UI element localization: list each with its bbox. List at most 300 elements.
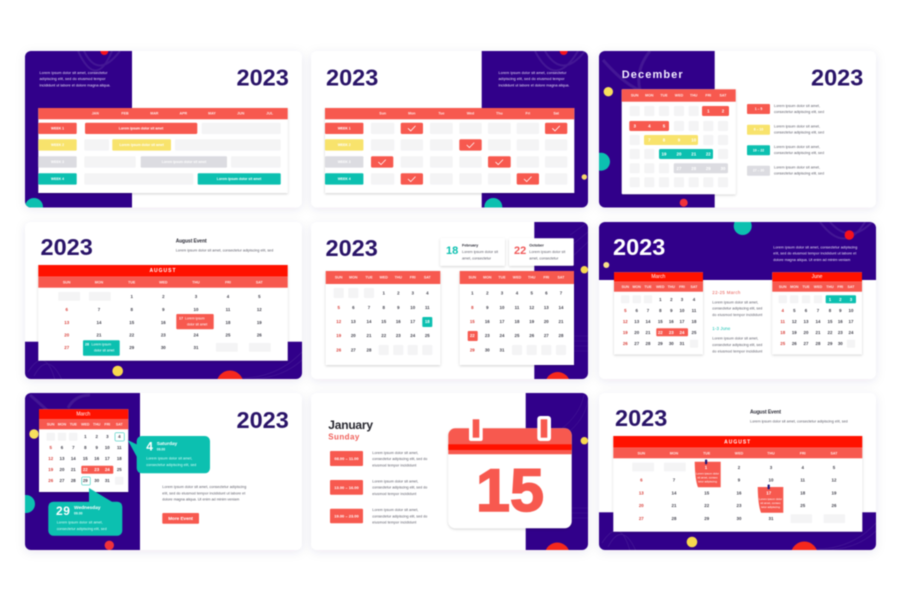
June calendar: 11 <box>780 319 786 324</box>
right month calendar: 15 <box>470 319 475 324</box>
March calendar: March <box>76 411 90 417</box>
March calendar: 23 <box>94 467 100 472</box>
event notes <box>712 290 762 353</box>
date card: February 18: 18 <box>446 245 458 257</box>
March calendar: 27 <box>60 478 65 483</box>
December calendar: MON <box>645 94 654 98</box>
March calendar: 9 <box>670 308 673 313</box>
intro text: dolore magna aliqua. Ut enim ad minim veniam <box>773 258 850 262</box>
August calendar: 5 <box>833 465 836 470</box>
August calendar: MON <box>95 280 104 284</box>
August calendar: 10 <box>194 307 199 312</box>
legend: consectetur adipiscing elit, sed <box>774 110 824 114</box>
right month calendar: 12 <box>529 305 535 310</box>
check table: WEEK 3 <box>338 160 351 164</box>
August calendar: AUGUST <box>724 439 751 445</box>
event notes: consectetur adipiscing elit, sed <box>712 307 762 311</box>
March calendar: THU <box>668 285 675 289</box>
December calendar: 1 <box>707 108 710 114</box>
check table: WEEK 2 <box>338 143 351 147</box>
December calendar: 21 <box>691 152 697 156</box>
August calendar: 14 <box>672 490 677 496</box>
August calendar: 30 <box>161 345 166 350</box>
June calendar: TUE <box>802 285 810 289</box>
March calendar: 31 <box>680 341 685 346</box>
left month calendar <box>326 271 440 365</box>
event marker: 17 <box>176 314 214 329</box>
body text: elit, sed do eiusmod tempor incididunt ut labore et <box>162 491 245 495</box>
August calendar: THU <box>192 280 200 284</box>
August calendar: 20 <box>639 503 644 508</box>
August calendar: THU <box>767 451 775 455</box>
August calendar: 18 <box>226 320 231 325</box>
intro text: incididunt ut labore et dolore magna aliqua. <box>498 84 570 88</box>
December calendar: FRI <box>705 94 711 98</box>
year heading: 2023 <box>236 64 289 90</box>
left month calendar: 11 <box>425 305 430 310</box>
August calendar: 15 <box>129 320 135 325</box>
June calendar: SAT <box>848 285 855 289</box>
callout: Wednesday 29: Lorem ipsum dolor sit amet, <box>57 521 103 525</box>
March calendar: 22 <box>658 330 663 335</box>
left month calendar: 26 <box>336 348 342 352</box>
December calendar: 27 <box>677 166 682 171</box>
August calendar: 12 <box>257 307 262 312</box>
legend: consectetur adipiscing elit, sed <box>774 172 824 176</box>
August calendar: 27 <box>639 516 644 521</box>
December calendar: 28 <box>691 166 697 171</box>
purple sidebar with dots <box>592 51 715 208</box>
event description: August Event <box>176 239 207 245</box>
August calendar: 2 <box>738 465 741 470</box>
March calendar: 18 <box>117 456 122 461</box>
legend: Lorem ipsum dolor sit amet, <box>774 104 820 108</box>
June calendar: 28 <box>816 341 821 346</box>
yellow dot <box>603 262 609 268</box>
sticky note: 17: Lorem ipsum dolor <box>759 497 782 501</box>
date card: February 18: amet, consectetur <box>462 256 492 260</box>
right month calendar: 9 <box>486 305 489 310</box>
December calendar: 19 <box>662 152 667 156</box>
left month calendar: 18 <box>425 319 430 324</box>
August calendar: 21 <box>672 503 677 508</box>
August calendar: SAT <box>831 451 838 455</box>
gantt table: JAN <box>92 112 99 116</box>
August calendar: 6 <box>640 478 643 482</box>
sticky note: 1: Lorem ipsum dolor <box>696 472 719 476</box>
legend: 6 – 10 <box>754 128 763 132</box>
year heading: 2023 <box>40 234 93 260</box>
left month calendar: 20 <box>351 333 356 338</box>
left month calendar: 13 <box>351 319 356 324</box>
date card: October 22 <box>509 238 574 266</box>
year heading: 2023 <box>326 64 378 90</box>
event marker: 17: Lorem ipsum <box>185 316 205 320</box>
August calendar: 5 <box>258 294 261 299</box>
gantt table: MAY <box>208 112 216 116</box>
yellow dot <box>581 437 588 444</box>
March calendar <box>39 409 128 492</box>
August calendar: MON <box>670 451 679 455</box>
right month calendar: 11 <box>515 305 520 310</box>
right month calendar: MON <box>483 275 492 279</box>
March calendar: 20 <box>60 467 65 472</box>
callout: Saturday 4: Saturday <box>157 441 178 447</box>
June calendar: 14 <box>816 319 821 324</box>
legend: 27 – 30 <box>753 169 764 173</box>
March calendar: 16 <box>669 319 674 324</box>
right month calendar: 28 <box>559 333 564 338</box>
time slots: consectetur adipiscing elit, sed do <box>372 486 427 490</box>
left month calendar: 12 <box>336 319 342 324</box>
June calendar: 4 <box>781 308 784 313</box>
gantt table: MAR <box>150 112 159 116</box>
August calendar: 23 <box>161 332 166 338</box>
March calendar: THU <box>93 422 101 426</box>
March calendar: 17 <box>105 456 110 461</box>
sticky note: 17: sit amet, consec <box>760 501 781 505</box>
March calendar: TUE <box>644 285 652 289</box>
March calendar: 19 <box>623 330 628 335</box>
December calendar: 10 <box>691 138 697 142</box>
legend: consectetur adipiscing elit, sed <box>774 130 824 134</box>
sticky note: 17: tetur adipiscing <box>761 505 780 509</box>
June calendar: 16 <box>838 319 843 324</box>
right month calendar: 16 <box>485 319 490 324</box>
March calendar: 12 <box>48 456 54 461</box>
legend: Lorem ipsum dolor sit amet, <box>774 145 820 149</box>
gantt table: JUL <box>266 112 274 116</box>
left month calendar: 3 <box>411 290 414 296</box>
August calendar: 4 <box>227 294 230 299</box>
right month calendar: 24 <box>500 333 505 338</box>
legend: 1 – 5 <box>755 107 762 111</box>
date card: February 18: February <box>462 243 479 247</box>
left month calendar: 23 <box>396 333 401 338</box>
right month calendar: WED <box>513 275 522 279</box>
August calendar: 24 <box>194 332 199 338</box>
June calendar: 7 <box>817 308 820 313</box>
time slots: Lorem ipsum dolor sit amet, <box>372 508 418 512</box>
March calendar: WED <box>81 422 90 426</box>
August calendar: 12 <box>832 478 837 482</box>
August calendar: 11 <box>226 307 231 312</box>
event marker: 28: dolor sit amet <box>94 348 114 352</box>
March calendar: 29 <box>658 341 663 346</box>
March calendar: 24 <box>680 330 685 335</box>
August calendar: WED <box>735 451 744 455</box>
right month calendar: 22 <box>470 333 475 338</box>
left month calendar: 9 <box>397 305 400 310</box>
callout: Wednesday 29: 09.00 <box>74 512 83 516</box>
December calendar: TUE <box>660 94 668 98</box>
left month calendar: 4 <box>426 290 429 296</box>
time slots: Lorem ipsum dolor sit amet, <box>372 451 418 455</box>
callout: Wednesday 29: Wednesday <box>74 505 101 511</box>
March calendar: 12 <box>623 319 628 324</box>
time slots: consectetur adipiscing elit, sed do <box>372 457 427 461</box>
right month calendar: 7 <box>560 290 563 296</box>
check table <box>325 108 574 193</box>
August calendar: 7 <box>98 307 101 312</box>
sticky note: 1: sit amet, consec <box>697 476 718 480</box>
left month calendar: 24 <box>410 333 416 338</box>
December calendar: 29 <box>706 166 711 171</box>
August calendar: 31 <box>194 345 199 350</box>
time slots: 08.00 – 11.00 <box>334 456 359 461</box>
intro text: incididunt ut labore et dolore magna aliqua. <box>40 84 110 88</box>
right month calendar: 19 <box>529 319 535 324</box>
left month calendar: 6 <box>352 305 355 310</box>
purple sidebar with dots <box>534 222 588 397</box>
March calendar: 20 <box>634 330 640 335</box>
purple footer band with dots <box>24 340 303 380</box>
time slots: eiusmod tempor incididunt <box>372 520 416 524</box>
March calendar: 4 <box>693 297 696 302</box>
legend <box>747 104 824 176</box>
August calendar: FRI <box>800 451 806 455</box>
year heading: 2023 <box>326 235 378 261</box>
event notes: 1-3 June <box>712 326 731 331</box>
event marker: 28: 28 <box>85 342 89 346</box>
callout: Saturday 4: consectetur adipiscing elit, sed <box>146 463 196 467</box>
right month calendar: 4 <box>516 290 519 296</box>
June calendar: 3 <box>850 297 853 302</box>
June calendar: June <box>812 274 823 280</box>
March calendar: 5 <box>49 445 52 450</box>
right month calendar: 25 <box>515 333 520 338</box>
left month calendar: 16 <box>396 319 401 324</box>
callout: Saturday 4 <box>128 436 210 473</box>
right month calendar: 6 <box>545 290 548 296</box>
panel: two month calendars <box>311 222 588 397</box>
intro text: adipiscing elit, sed do eiusmod tempor <box>498 77 565 81</box>
event marker: 17: 17 <box>179 316 183 320</box>
August calendar: FRI <box>225 280 231 284</box>
callout: Saturday 4: Lorem ipsum dolor sit amet, <box>146 457 192 461</box>
date card: October 22: 22 <box>514 245 526 257</box>
August calendar: 23 <box>737 503 742 508</box>
March calendar: 7 <box>72 445 75 450</box>
right month calendar: SAT <box>558 275 565 279</box>
gantt table: FEB <box>121 112 129 116</box>
August calendar: 19 <box>257 320 262 325</box>
yellow dot <box>581 266 588 273</box>
panel: weekly gantt schedule <box>25 47 302 216</box>
March calendar: 4 <box>118 434 121 439</box>
June calendar: 20 <box>804 330 809 335</box>
check table: WEEK 1 <box>338 126 351 130</box>
year heading: 2023 <box>615 405 667 431</box>
June calendar: 27 <box>804 341 809 346</box>
June calendar: 17 <box>849 319 854 324</box>
intro text <box>773 246 857 262</box>
June calendar: 19 <box>792 330 797 335</box>
panel: January daily schedule <box>311 393 588 568</box>
check table: Sat <box>553 112 560 116</box>
check table: Sun <box>379 112 386 116</box>
August calendar: 21 <box>97 332 102 338</box>
left month calendar: 1 <box>382 290 385 296</box>
June calendar: MON <box>790 285 799 289</box>
August calendar: 9 <box>738 478 741 482</box>
March calendar <box>614 272 703 354</box>
check table: WEEK 4 <box>338 177 351 181</box>
August calendar: 16 <box>161 320 166 325</box>
March calendar: FRI <box>679 285 685 289</box>
panel: March and June calendars <box>599 217 876 379</box>
December calendar: 9 <box>678 138 681 142</box>
event notes: 22-25 March <box>712 290 741 295</box>
date card: October 22: October <box>529 243 544 247</box>
June calendar: 29 <box>828 341 833 346</box>
event marker: 28 <box>83 340 120 356</box>
August calendar: 22 <box>704 503 710 508</box>
right month calendar: 30 <box>485 348 490 352</box>
March calendar: 16 <box>94 456 100 461</box>
August calendar: 3 <box>770 465 773 470</box>
August calendar: 1 <box>130 294 133 299</box>
March calendar: 8 <box>84 445 87 450</box>
March calendar: 31 <box>105 478 110 483</box>
gantt table: JUN <box>237 112 245 116</box>
purple sidebar with dots <box>17 393 140 550</box>
event description: August Event <box>750 410 781 416</box>
August calendar: 2 <box>162 294 165 299</box>
sticky note: 17 <box>758 484 783 513</box>
March calendar: SUN <box>47 422 55 426</box>
event notes: do eiusmod tempor incididunt <box>712 349 762 353</box>
date card: February 18: Lorem ipsum dolor sit <box>462 250 498 254</box>
December calendar: 20 <box>677 152 682 156</box>
right month calendar: 8 <box>471 305 474 310</box>
August calendar: 15 <box>704 490 710 496</box>
August calendar: 10 <box>769 478 774 482</box>
legend: Lorem ipsum dolor sit amet, <box>774 165 820 169</box>
right month calendar: 27 <box>544 333 549 338</box>
March calendar: 29 <box>83 478 88 483</box>
event description: Lorem ipsum dolor sit amet, consectetur adipiscing elit, sed <box>750 419 848 423</box>
June calendar: 23 <box>838 330 843 335</box>
right month calendar: 2 <box>486 290 489 296</box>
left month calendar: 14 <box>367 319 372 324</box>
August calendar: 27 <box>64 345 70 350</box>
intro text <box>40 71 110 88</box>
year heading: 2023 <box>236 407 289 433</box>
panel: weekly check table <box>311 47 589 216</box>
left month calendar: 22 <box>381 333 387 338</box>
legend: 19 – 22 <box>753 148 764 152</box>
March calendar: 21 <box>71 467 76 472</box>
March calendar: 1 <box>659 297 662 302</box>
time slots <box>330 451 427 524</box>
August calendar: 6 <box>65 307 68 312</box>
right month calendar: 29 <box>470 348 475 352</box>
gantt table <box>38 108 288 193</box>
June calendar: 1 <box>829 297 832 302</box>
left month calendar: 25 <box>425 333 430 338</box>
March calendar: 25 <box>692 330 697 335</box>
intro text: elit, sed do eiusmod tempor incididunt ut labore et <box>773 252 856 256</box>
December calendar: THU <box>690 94 698 98</box>
August calendar: AUGUST <box>149 268 177 274</box>
March calendar: 24 <box>105 467 110 472</box>
time slots: 19.00 – 23.00 <box>334 514 360 518</box>
March calendar: 3 <box>681 297 684 302</box>
June calendar: 25 <box>780 341 786 346</box>
purple footer band with dots <box>598 511 877 551</box>
August calendar: 26 <box>257 332 262 338</box>
left month calendar: 17 <box>410 319 416 324</box>
right month calendar: 18 <box>515 319 520 324</box>
panel: August sticky note calendar <box>598 404 878 554</box>
August calendar: 19 <box>832 490 837 496</box>
event notes: consectetur adipiscing elit, sed <box>712 343 762 347</box>
time slots: consectetur adipiscing elit, sed do <box>372 514 427 518</box>
August calendar: 14 <box>97 320 102 325</box>
right month calendar: 20 <box>544 319 549 324</box>
check table: Tue <box>438 112 444 116</box>
December calendar: 4 <box>648 124 651 128</box>
event notes: Lorem ipsum dolor sit amet, <box>712 337 758 341</box>
panel: August event calendar <box>24 232 304 382</box>
left month calendar: TUE <box>365 275 373 279</box>
gantt table: WEEK 4 <box>51 177 64 181</box>
March calendar: 6 <box>635 308 638 313</box>
right month calendar: SUN <box>469 275 476 279</box>
left month calendar: 15 <box>381 319 387 324</box>
check table: Wed <box>467 112 474 116</box>
March calendar: 15 <box>83 456 88 461</box>
right month calendar: 13 <box>544 305 549 310</box>
August calendar: 26 <box>832 503 837 508</box>
June calendar: THU <box>826 285 834 289</box>
right month calendar: 5 <box>530 290 533 296</box>
button: More Event: More Event <box>168 516 193 521</box>
date card: October 22: Lorem ipsum dolor sit <box>529 250 565 254</box>
date card: February 18 <box>440 238 505 266</box>
March calendar: 30 <box>94 478 100 483</box>
right month calendar: FRI <box>543 275 549 279</box>
month title: December <box>622 69 683 81</box>
right month calendar <box>460 271 574 365</box>
right month calendar: 17 <box>500 319 505 324</box>
August calendar: WED <box>159 280 168 284</box>
left month calendar: 21 <box>367 333 372 338</box>
August calendar: 28 <box>672 516 677 521</box>
left month calendar: 7 <box>368 305 371 310</box>
June calendar: 13 <box>804 319 809 324</box>
August calendar: 20 <box>64 332 70 338</box>
March calendar: 13 <box>634 319 640 324</box>
right month calendar: 3 <box>501 290 504 296</box>
big calendar icon: 15 <box>448 416 572 528</box>
June calendar: FRI <box>837 285 843 289</box>
December calendar: 30 <box>721 166 726 171</box>
callout: Saturday 4: 4 <box>146 440 153 454</box>
intro text: Lorem ipsum dolor sit amet, consectetur <box>498 71 567 75</box>
purple sidebar with dots <box>482 47 589 216</box>
June calendar: 18 <box>780 330 786 335</box>
body text: dolore magna aliqua. Ut enim ad minim veniam <box>162 498 239 502</box>
left month calendar: WED <box>380 275 388 279</box>
August calendar: 4 <box>801 465 804 470</box>
June calendar: 24 <box>849 330 854 335</box>
time slots: eiusmod tempor incididunt <box>372 492 416 496</box>
August calendar: 25 <box>226 332 231 338</box>
March calendar: 7 <box>647 308 650 313</box>
August calendar: SAT <box>256 280 264 284</box>
